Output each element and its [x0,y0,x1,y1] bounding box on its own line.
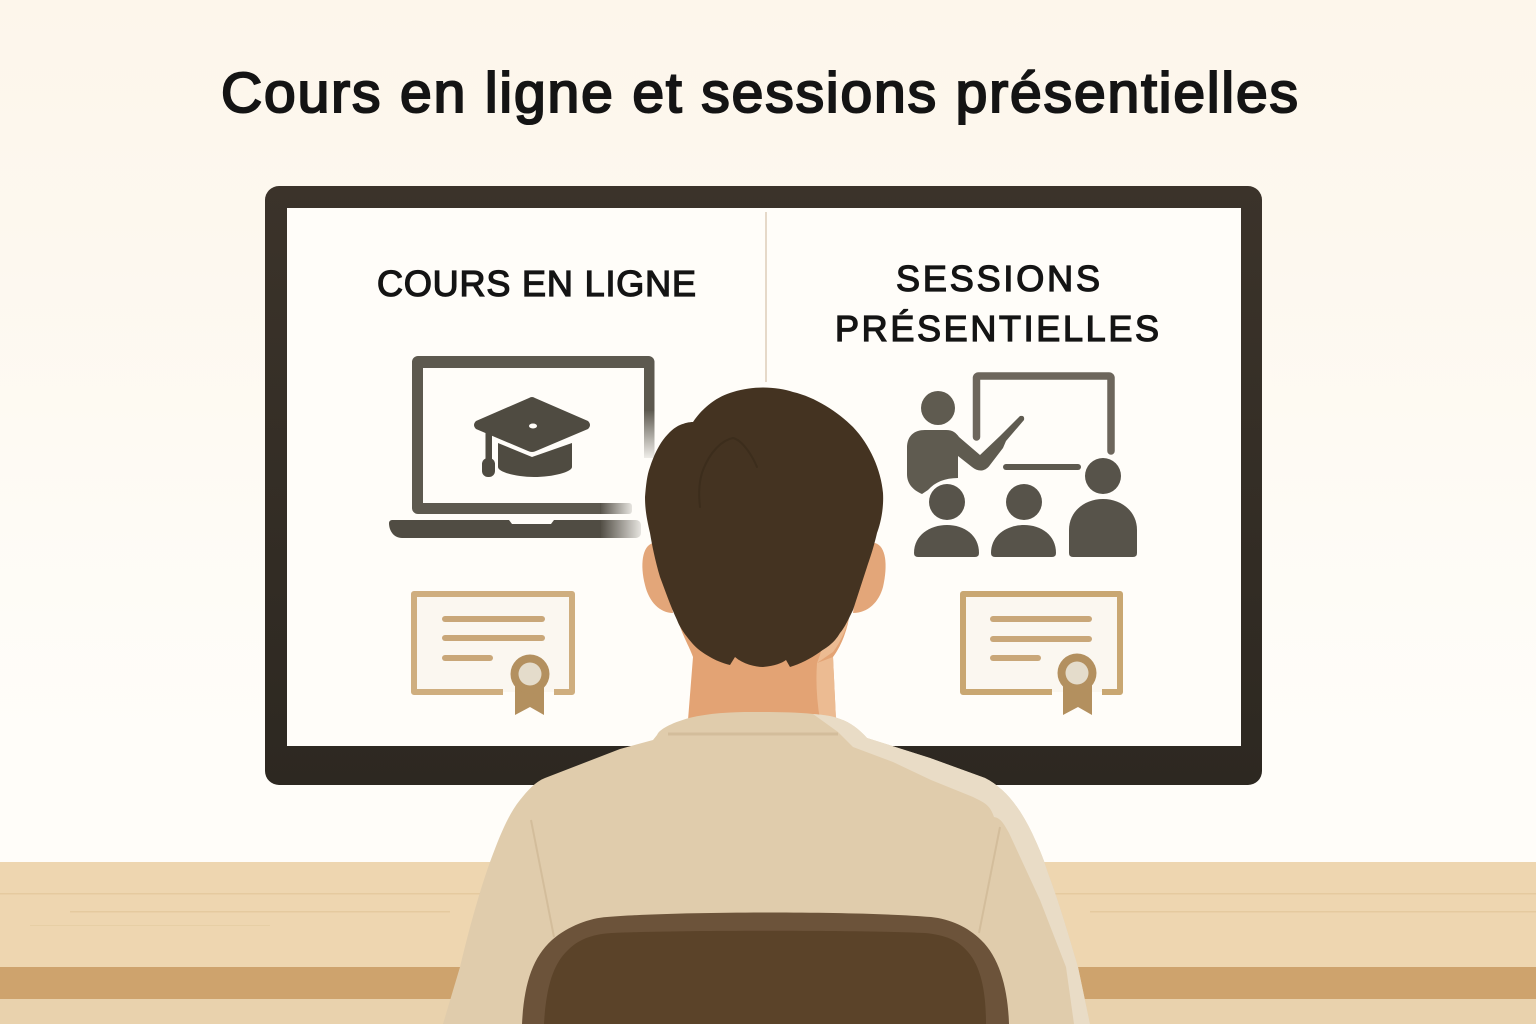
monitor frame [265,186,1262,785]
icon: certificate left [414,594,572,715]
icon: laptop with graduation cap [389,356,654,538]
icon: certificate right [963,594,1120,715]
hair [645,387,883,667]
heading: sessions présentielles: PRÉSENTIELLES [835,308,1159,349]
person seen from behind [443,387,1090,1024]
student middle [991,484,1056,557]
shirt highlight [813,714,1090,1024]
heading: sessions présentielles: SESSIONS [896,258,1100,299]
heading: cours en ligne: COURS EN LIGNE [377,263,696,304]
student right [1069,458,1137,557]
neck highlight [816,600,850,720]
icon: graduation cap [474,397,590,477]
hair shading [699,438,757,507]
desk [0,862,1536,1024]
chair back [522,912,1009,1024]
icon: teacher and students [907,376,1137,557]
monitor [265,186,1262,785]
teacher [907,391,1024,494]
neck [678,612,850,720]
whiteboard [976,376,1111,451]
heading: sessions présentielles [835,258,1159,349]
shirt seams [531,734,1000,937]
title: Cours en ligne et sessions présentielles [221,61,1298,125]
monitor screen [287,208,1241,746]
screen divider [765,212,767,382]
shirt [443,712,1090,1024]
student left [914,484,979,557]
ears [642,543,886,613]
